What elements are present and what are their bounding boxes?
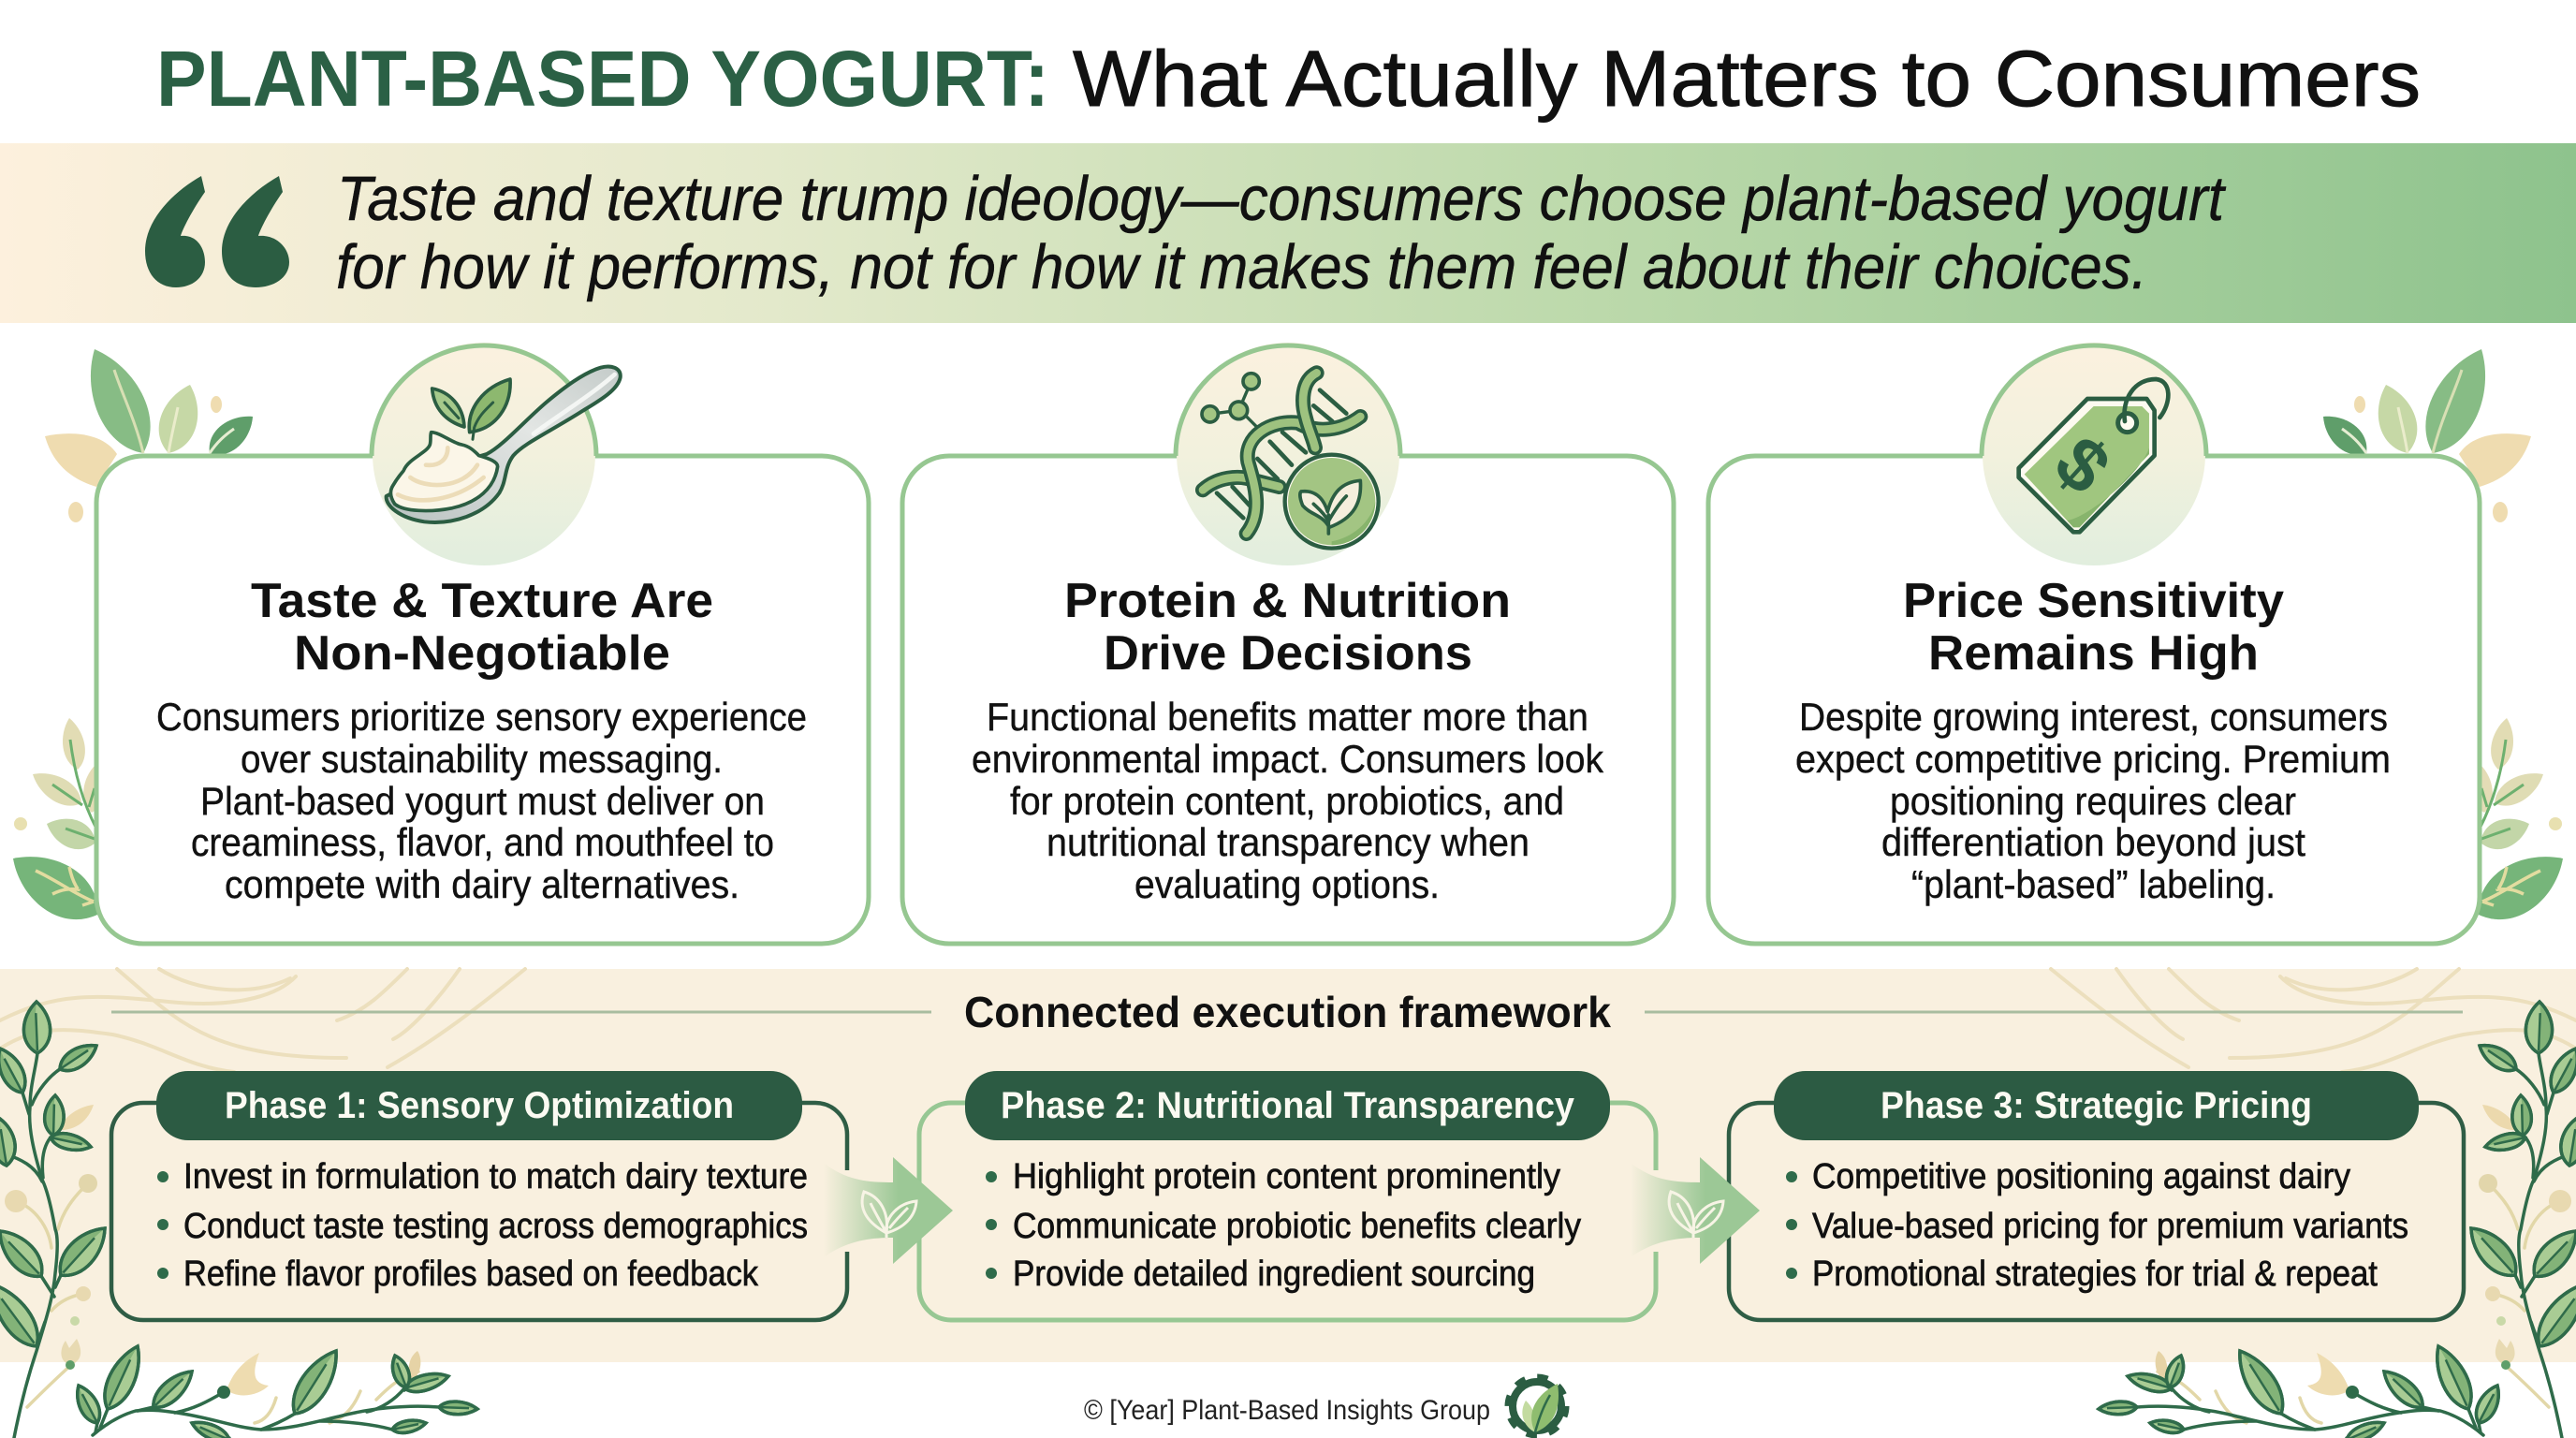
icon: quotation mark xyxy=(145,176,289,287)
panel: taste and texture xyxy=(96,343,869,944)
card body text: “plant-based” labeling. xyxy=(1911,862,2276,906)
decorative leaves: top right xyxy=(2315,339,2531,522)
card body text: Plant-based yogurt must deliver on xyxy=(200,779,765,823)
card body text: Consumers prioritize sensory experience xyxy=(156,695,807,739)
card heading: Taste & Texture Are xyxy=(251,574,713,628)
phase 2 title pill xyxy=(965,1071,1610,1140)
phase 3 bullet list: Competitive positioning against dairy xyxy=(1812,1157,2350,1196)
phase 3 bullet list: Promotional strategies for trial & repeat xyxy=(1812,1255,2378,1294)
decorative leaves: top left xyxy=(45,339,261,522)
card heading: Non-Negotiable xyxy=(294,626,670,681)
card body text: differentiation beyond just xyxy=(1881,820,2305,864)
card body text: evaluating options. xyxy=(1134,862,1440,906)
title xyxy=(156,35,2421,123)
section heading: Connected execution framework xyxy=(964,988,1611,1036)
card heading: Price Sensitivity xyxy=(1903,574,2284,628)
phase 1 title pill xyxy=(156,1071,802,1140)
execution framework band xyxy=(0,969,2576,1362)
title: PLANT-BASED YOGURT: xyxy=(156,35,1049,123)
card body text: Functional benefits matter more than xyxy=(987,695,1588,739)
footer xyxy=(1084,1378,1565,1434)
card body text: compete with dairy alternatives. xyxy=(225,862,739,906)
foliage: right vine and sprig xyxy=(2051,969,2576,1438)
card body text: environmental impact. Consumers look xyxy=(972,737,1604,781)
icon: spoon of yogurt with leaves xyxy=(387,367,621,522)
quote text xyxy=(336,164,2226,302)
title: What Actually Matters to Consumers xyxy=(1073,35,2421,123)
quote banner xyxy=(0,143,2576,323)
phase 3 bullet list xyxy=(1786,1157,2408,1294)
phase 3 title pill xyxy=(1774,1071,2419,1140)
card body text xyxy=(972,695,1604,906)
phase 1 bullet list: Conduct taste testing across demographics xyxy=(183,1207,808,1246)
icon: price tag with dollar sign xyxy=(2019,379,2168,532)
phase 1 bullet list: Refine flavor profiles based on feedback xyxy=(183,1255,759,1294)
card body text xyxy=(156,695,807,906)
quote text: for how it performs, not for how it makes them feel about their choices. xyxy=(336,232,2147,302)
panel: phase 3 xyxy=(1729,1071,2464,1320)
phase 1 bullet list xyxy=(157,1157,808,1294)
decorative leaves: middle left xyxy=(0,716,111,935)
card body text: over sustainability messaging. xyxy=(241,737,723,781)
foliage: left vine and sprig xyxy=(0,969,525,1438)
card body text xyxy=(1795,695,2391,906)
phase 2 bullet list xyxy=(986,1157,1581,1294)
arrow: phase 1 to phase 2 xyxy=(824,1157,953,1264)
phase 1 title pill: Phase 1: Sensory Optimization xyxy=(225,1085,734,1126)
panel: price sensitivity xyxy=(1708,343,2480,944)
card body text: positioning requires clear xyxy=(1890,779,2296,823)
icon: DNA helix with leaf badge xyxy=(1202,373,1379,549)
card body text: creaminess, flavor, and mouthfeel to xyxy=(191,820,774,864)
phase 2 title pill: Phase 2: Nutritional Transparency xyxy=(1001,1085,1575,1126)
section heading xyxy=(111,988,2463,1036)
panel: protein and nutrition xyxy=(902,343,1674,944)
panel: phase 2 xyxy=(919,1071,1656,1320)
icon: gear with leaf xyxy=(1509,1378,1565,1434)
quote text: Taste and texture trump ideology—consumers choose plant-based yogurt xyxy=(337,164,2226,234)
card heading xyxy=(1903,574,2284,681)
phase 2 bullet list: Highlight protein content prominently xyxy=(1013,1157,1560,1196)
phase 3 title pill: Phase 3: Strategic Pricing xyxy=(1881,1085,2312,1126)
card body text: for protein content, probiotics, and xyxy=(1010,779,1564,823)
card heading: Drive Decisions xyxy=(1104,626,1472,681)
card heading xyxy=(251,574,713,681)
panel: phase 1 xyxy=(111,1071,847,1320)
decorative leaves: middle right xyxy=(2465,716,2576,935)
card body text: Despite growing interest, consumers xyxy=(1799,695,2388,739)
footer: © [Year] Plant-Based Insights Group xyxy=(1084,1395,1490,1426)
card body text: expect competitive pricing. Premium xyxy=(1795,737,2391,781)
card body text: nutritional transparency when xyxy=(1046,820,1530,864)
phase 1 bullet list: Invest in formulation to match dairy texture xyxy=(183,1157,808,1196)
card heading: Protein & Nutrition xyxy=(1064,574,1511,628)
phase 2 bullet list: Provide detailed ingredient sourcing xyxy=(1013,1255,1535,1294)
arrow: phase 2 to phase 3 xyxy=(1631,1157,1760,1264)
icon: price tag with dollar sign: $ xyxy=(2040,419,2126,509)
card heading xyxy=(1064,574,1511,681)
phase 3 bullet list: Value-based pricing for premium variants xyxy=(1812,1207,2408,1246)
card heading: Remains High xyxy=(1928,626,2259,681)
phase 2 bullet list: Communicate probiotic benefits clearly xyxy=(1013,1207,1581,1246)
